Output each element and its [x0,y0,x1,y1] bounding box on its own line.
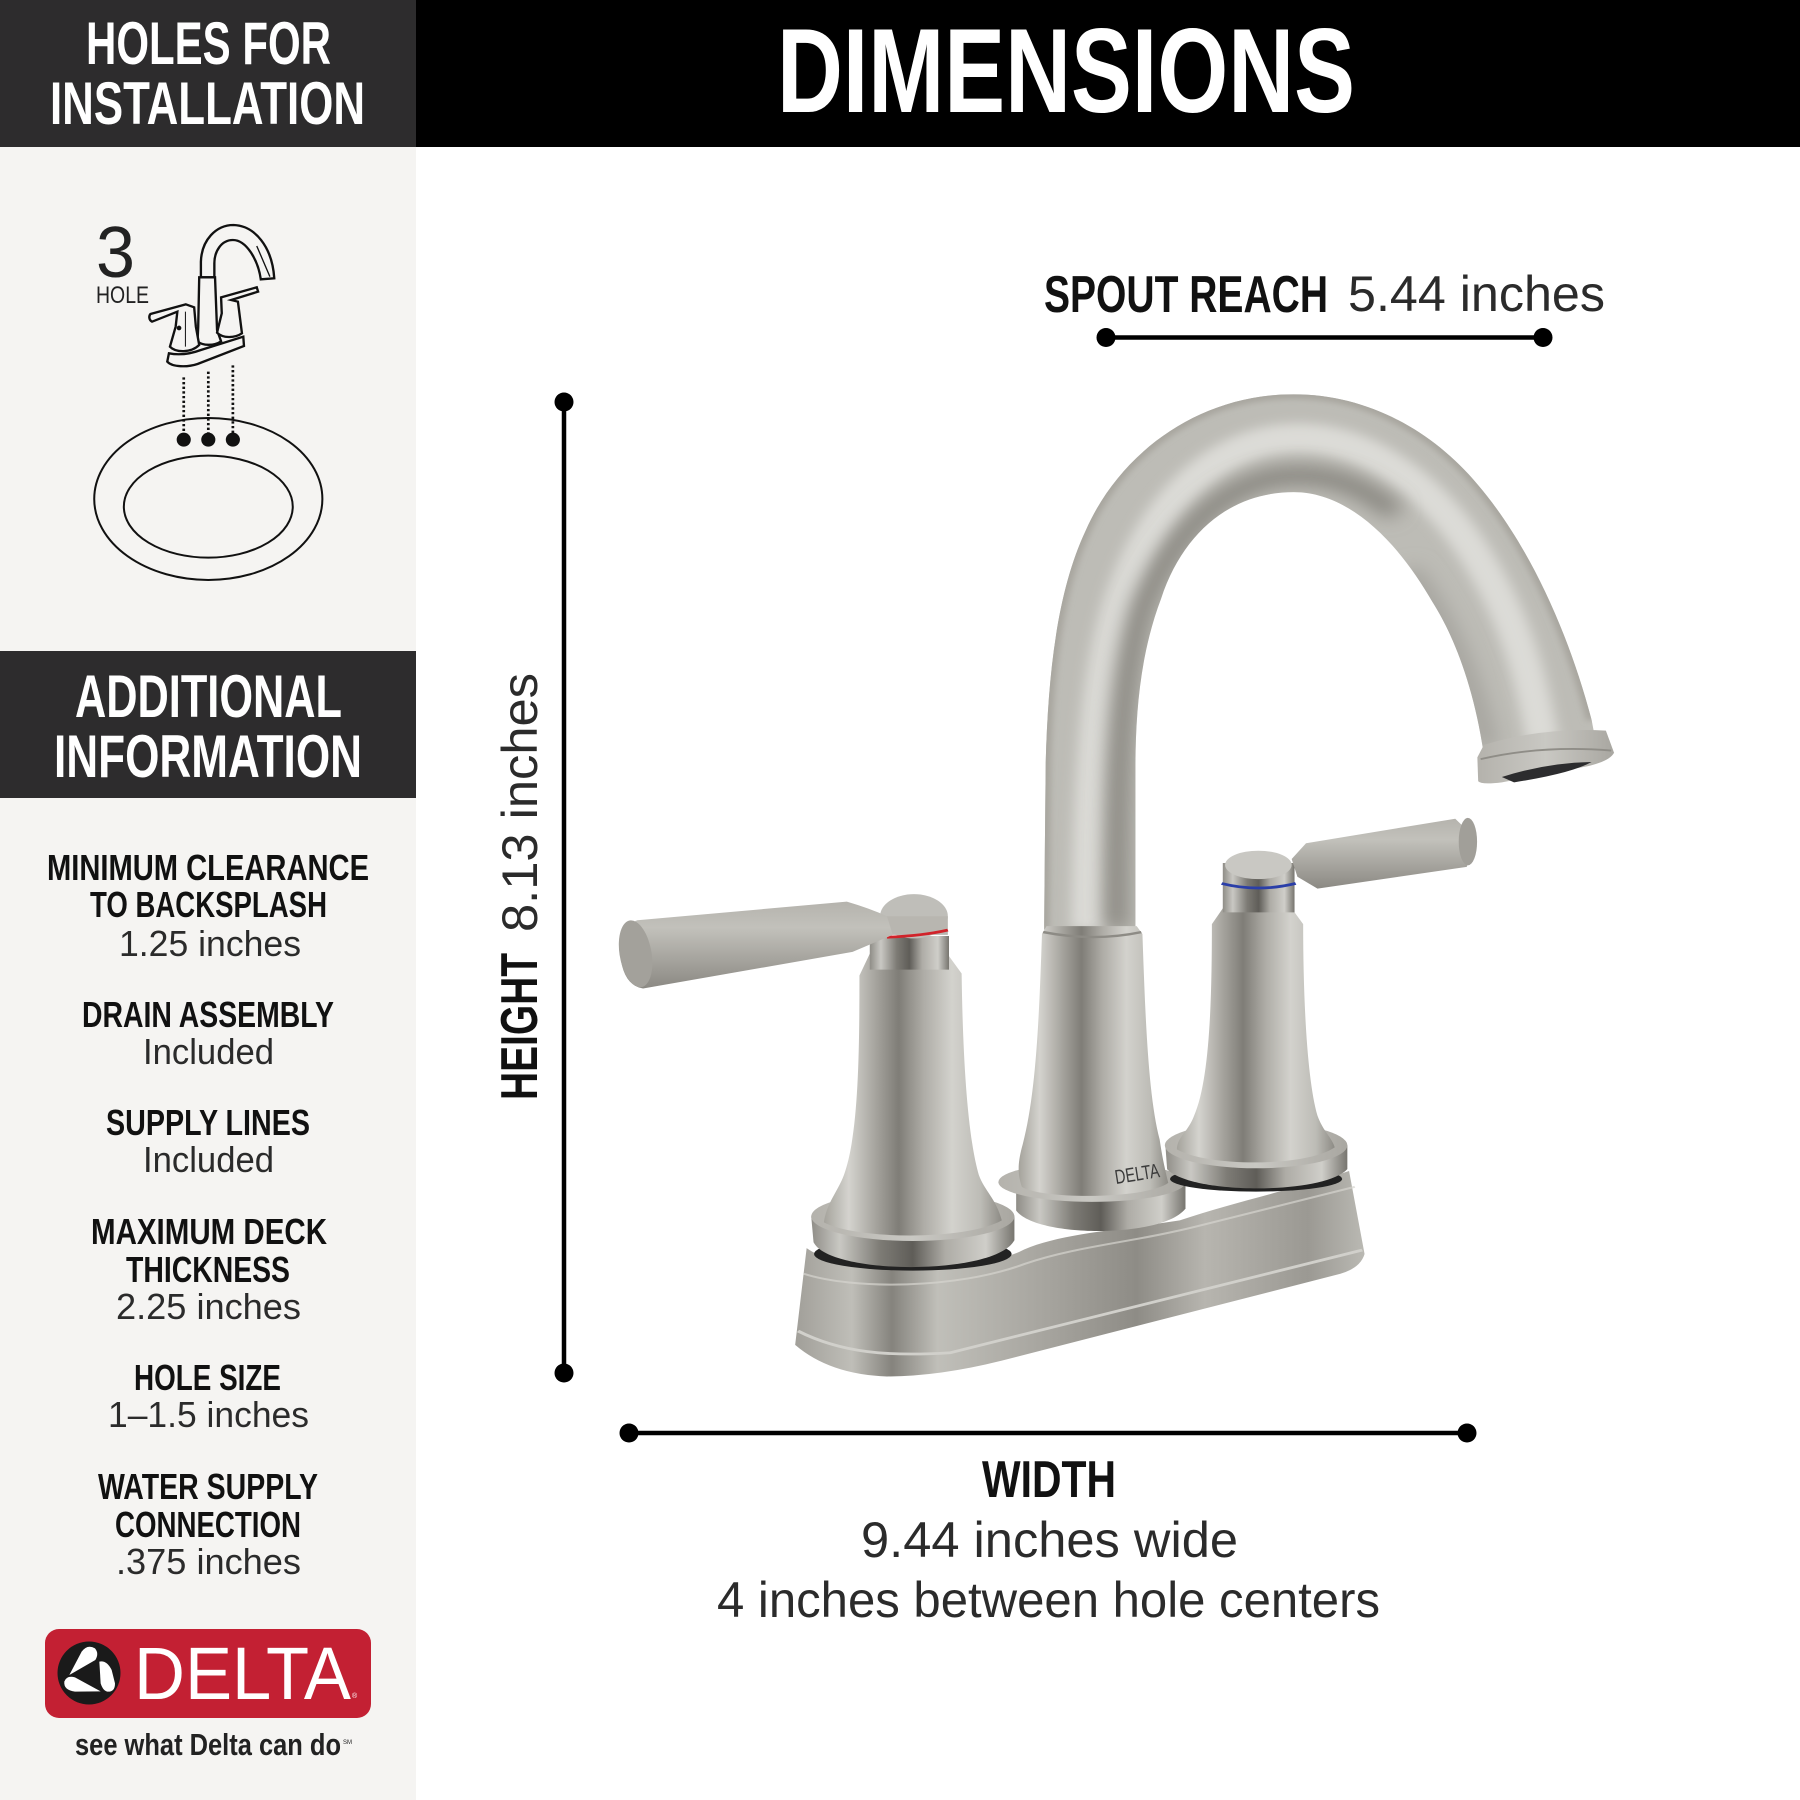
spec: water supply connection: CONNECTION [115,1504,301,1545]
logo: delta: ® [352,1692,358,1700]
label: width [717,1451,1380,1628]
heading: holes for installation: INSTALLATION [50,70,365,137]
arrow: spout reach dimension line [1096,328,1552,347]
spec: minimum clearance: 1.25 inches [119,923,301,964]
arrow: width dimension line [620,1424,1476,1442]
spec: maximum deck thickness: MAXIMUM DECK [91,1211,327,1252]
spec: hole size [108,1357,309,1435]
icon: 3 hole faucet and sink: 3 [96,213,135,293]
left handle [615,894,1014,1271]
heading: additional information [0,651,416,798]
heading: dimensions [416,0,1800,147]
label: spout reach: 5.44 inches [1348,266,1605,322]
spec: drain assembly: Included [143,1031,274,1072]
heading: additional information: INFORMATION [54,723,362,790]
logo: delta: SM [343,1740,352,1746]
spec: supply lines: Included [143,1139,274,1180]
label: width: WIDTH [982,1451,1116,1509]
spec: drain assembly: DRAIN ASSEMBLY [82,994,334,1035]
label: spout reach [1044,266,1605,324]
icon: 3 hole faucet and sink: HOLE [96,282,149,309]
heading: holes for installation: HOLES FOR [86,10,331,77]
sidebar background [0,0,416,1800]
spec: hole size: HOLE SIZE [134,1357,281,1398]
heading: holes for installation [0,0,416,147]
logo: delta: DELTA [134,1632,352,1715]
spec: maximum deck thickness: 2.25 inches [116,1286,301,1327]
spec: maximum deck thickness: THICKNESS [126,1249,290,1290]
center spout body [998,926,1185,1231]
label: width: 4 inches between hole centers [717,1572,1380,1628]
faucet product image [615,384,1624,1376]
spec: minimum clearance [47,847,369,964]
icon: 3 hole faucet and sink [94,213,322,580]
spec: minimum clearance: MINIMUM CLEARANCE [47,847,369,888]
spec: water supply connection [98,1466,318,1582]
faucet engraved brand mark: DELTA [1113,1160,1162,1189]
spec: water supply connection: .375 inches [116,1541,301,1582]
faucet base plate [795,1171,1365,1376]
label: spout reach: SPOUT REACH [1044,266,1328,324]
label: height: 8.13 inches [492,673,548,932]
logo: delta: see what Delta can do [75,1727,341,1762]
label: height [491,673,549,1100]
spec: supply lines: SUPPLY LINES [106,1102,310,1143]
spec: minimum clearance: TO BACKSPLASH [90,884,327,925]
spec: supply lines [106,1102,310,1180]
heading: dimensions: DIMENSIONS [777,4,1355,138]
logo: delta [45,1629,371,1762]
spec: water supply connection: WATER SUPPLY [98,1466,318,1507]
right handle [1165,818,1477,1192]
label: height: HEIGHT [491,953,549,1100]
arrow: height dimension line [554,392,574,1382]
spec: hole size: 1–1.5 inches [108,1394,309,1435]
faucet spout [1033,384,1624,934]
spec: maximum deck thickness [91,1211,327,1327]
spec: drain assembly [82,994,334,1072]
spout aerator flange [1477,730,1614,783]
label: width: 9.44 inches wide [861,1512,1238,1568]
heading: additional information: ADDITIONAL [75,663,342,730]
